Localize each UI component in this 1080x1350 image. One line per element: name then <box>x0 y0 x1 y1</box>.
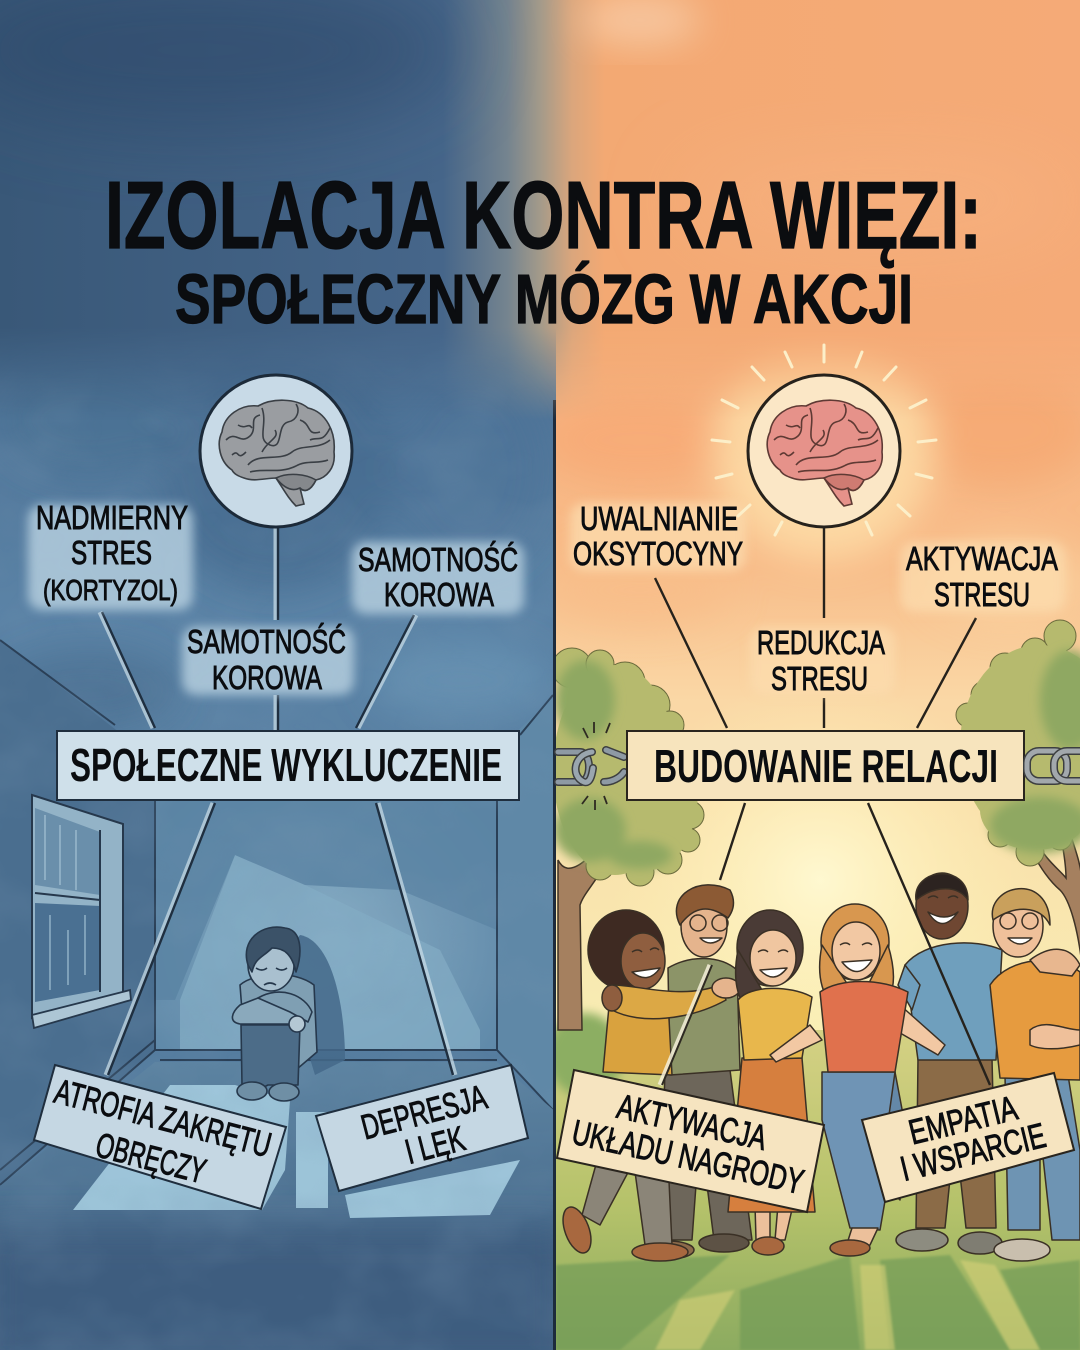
room lines <box>0 640 553 1185</box>
side wall right <box>498 729 553 1108</box>
torso <box>240 974 317 1075</box>
label: nadmierny stres <box>36 499 188 607</box>
wall light shape <box>180 855 480 1050</box>
wall top shadow <box>155 800 497 1000</box>
brain icon: grey <box>200 375 352 527</box>
tree right <box>956 620 1080 965</box>
banner: building relations <box>627 731 1024 800</box>
eyes <box>256 968 287 985</box>
links <box>558 750 624 782</box>
bushes <box>547 1013 1080 1097</box>
sad person <box>232 927 317 1101</box>
canopy <box>956 620 1076 866</box>
label: samotność korowa right: SAMOTNOŚĆ <box>358 540 518 578</box>
hair <box>246 927 300 972</box>
canopy <box>552 648 704 886</box>
sky <box>556 300 1080 1045</box>
window <box>32 795 131 1028</box>
sign: aktywacja <box>557 1070 824 1212</box>
label: samotność korowa center: SAMOTNOŚĆ <box>187 622 346 660</box>
label bubbles right <box>570 503 1065 695</box>
side wall left <box>0 640 155 1185</box>
tree left <box>552 648 704 1030</box>
label: redukcja stresu: REDUKCJA <box>757 624 885 661</box>
sign: empatia: EMPATIA <box>905 1088 1022 1152</box>
sign: depresja <box>316 1065 528 1191</box>
sky clouds <box>559 354 1080 596</box>
label: samotność korowa right <box>358 540 518 613</box>
floor light patch <box>73 1085 520 1218</box>
woman curly hair <box>558 910 740 1261</box>
brain icon: pink with rays <box>712 345 936 535</box>
connector lines <box>655 527 990 1085</box>
sign: atrofia <box>34 1065 286 1209</box>
trunk <box>558 838 616 1030</box>
label: uwalnianie oksytocyny <box>573 500 743 572</box>
label: redukcja stresu: STRESU <box>771 660 868 697</box>
woman coral top <box>770 904 945 1256</box>
sign: atrofia: ATROFIA ZAKRĘTU <box>51 1072 275 1165</box>
sign: depresja: DEPRESJA <box>357 1077 491 1147</box>
man orange shirt <box>990 889 1080 1261</box>
sign: atrofia: OBRĘCZY <box>92 1126 210 1191</box>
shoes <box>237 1082 267 1100</box>
label: aktywacja stresu: STRESU <box>934 576 1030 613</box>
broken chain <box>558 722 624 810</box>
grass shadows <box>556 1255 1080 1350</box>
banner: social exclusion: SPOŁECZNE WYKLUCZENIE <box>70 739 502 791</box>
connector lines <box>100 527 455 1075</box>
label: uwalnianie oksytocyny: OKSYTOCYNY <box>573 535 743 572</box>
wall wash <box>0 355 556 1186</box>
break marks <box>582 722 610 810</box>
woman yellow top <box>728 910 815 1255</box>
floor dark foreground <box>0 1225 570 1350</box>
label: samotność korowa center <box>187 622 346 696</box>
banner: social exclusion <box>57 731 519 800</box>
header background <box>0 0 1080 420</box>
hand <box>289 1016 305 1032</box>
title <box>105 162 982 338</box>
watercolor clouds <box>34 404 534 725</box>
man glasses <box>642 885 752 1259</box>
rays <box>712 345 936 535</box>
group of friends <box>558 873 1080 1261</box>
sun glow <box>700 801 939 981</box>
label: nadmierny stres: STRES <box>71 534 152 571</box>
watercolor mottling <box>0 694 553 1350</box>
sign: aktywacja: UKŁADU NAGRODY <box>568 1113 807 1202</box>
sign: aktywacja: AKTYWACJA <box>613 1087 771 1158</box>
chain right <box>1027 751 1080 781</box>
label: nadmierny stres: (KORTYZOL) <box>43 575 178 607</box>
sign: depresja: I LĘK <box>401 1119 469 1172</box>
label: redukcja stresu <box>757 624 885 697</box>
trunk <box>1038 839 1080 955</box>
arms <box>232 998 303 1024</box>
label bubbles left <box>28 505 524 695</box>
panel: connection <box>540 300 1080 1350</box>
label: nadmierny stres: NADMIERNY <box>36 499 188 536</box>
man blue shirt <box>896 873 1002 1254</box>
center divider <box>553 400 556 1350</box>
person shadow <box>293 935 345 1075</box>
label: aktywacja stresu <box>906 540 1058 613</box>
grass <box>556 1030 1080 1350</box>
back wall <box>156 856 496 1049</box>
panel: isolation <box>0 300 570 1350</box>
sign: empatia <box>862 1073 1074 1202</box>
floor <box>0 1102 553 1224</box>
label: samotność korowa right: KOROWA <box>384 576 494 613</box>
grass light stripes <box>655 1260 1040 1350</box>
head <box>247 948 294 992</box>
label: uwalnianie oksytocyny: UWALNIANIE <box>580 500 738 537</box>
legs <box>241 1025 300 1088</box>
label: samotność korowa center: KOROWA <box>212 659 322 696</box>
